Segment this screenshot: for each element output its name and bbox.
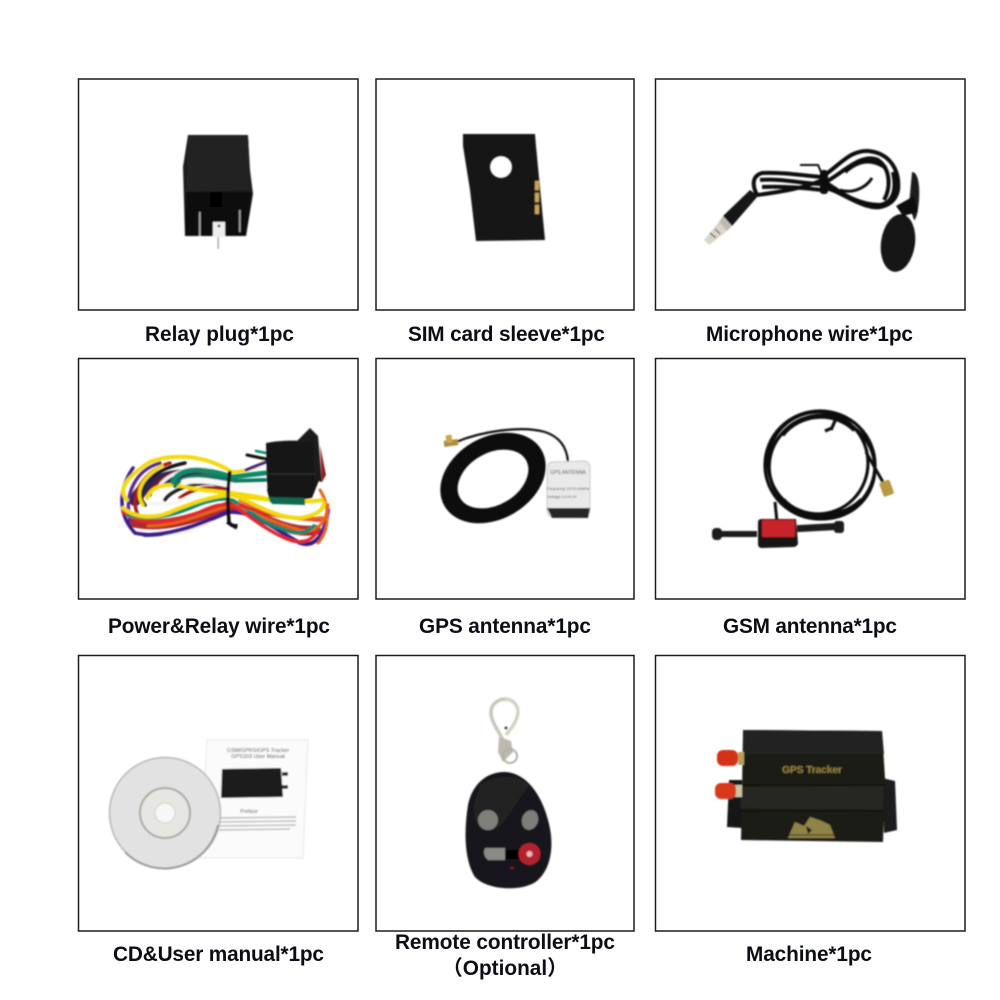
icon: SIM sleeve [463, 134, 545, 241]
panel: machine [656, 656, 965, 931]
icon: GPS antenna: GPS ANTENNA [550, 470, 586, 476]
icon: GPS tracker device: GPS Tracker [782, 764, 842, 776]
icon: GPS antenna: Frequency 1575.42MHz [547, 486, 589, 491]
panel: GPS antenna [376, 358, 634, 599]
label: GPS antenna: GPS antenna*1pc [419, 615, 591, 638]
icon: user manual and CD: Preface [240, 809, 258, 815]
wire bundle: crossing strands [123, 457, 324, 542]
panel: power and relay wire [78, 358, 358, 599]
label: SIM card sleeve: SIM card sleeve*1pc [408, 323, 605, 346]
icon: GSM antenna [712, 405, 894, 548]
icon: GPS antenna: Voltage 3.0-5.0V [547, 494, 577, 499]
panel: microphone wire [656, 79, 965, 310]
wire bundle: back strands [122, 463, 328, 544]
icon: user manual and CD: GPS103 User Manual [231, 754, 285, 760]
wire bundle: thick inner strands [173, 470, 265, 482]
panel: remote controller [376, 656, 634, 931]
icon: GPS tracker device [715, 730, 897, 842]
label: GSM antenna: GSM antenna*1pc [723, 615, 897, 638]
panel: CD and user manual [78, 656, 358, 931]
label: optional: （Optional） [442, 957, 568, 980]
icon: microphone cable [704, 151, 919, 274]
panel: GSM antenna [656, 358, 965, 599]
icon: key fob remote [466, 699, 551, 888]
label: power and relay wire: Power&Relay wire*1pc [108, 615, 330, 638]
icon: GPS antenna [428, 419, 590, 537]
label: machine: Machine*1pc [746, 943, 872, 966]
icon: wire harness [122, 428, 328, 544]
icon: user manual and CD [110, 740, 308, 868]
label: CD and user manual: CD&User manual*1pc [113, 943, 324, 966]
panel: relay plug [78, 79, 358, 310]
icon: user manual and CD: GSM/GPRS/GPS Tracker [227, 748, 289, 754]
label: remote controller: Remote controller*1pc [395, 931, 615, 954]
label: microphone wire: Microphone wire*1pc [706, 323, 913, 346]
icon: relay [183, 135, 253, 249]
label: relay plug: Relay plug*1pc [145, 323, 294, 346]
panel: SIM card sleeve [376, 79, 634, 310]
